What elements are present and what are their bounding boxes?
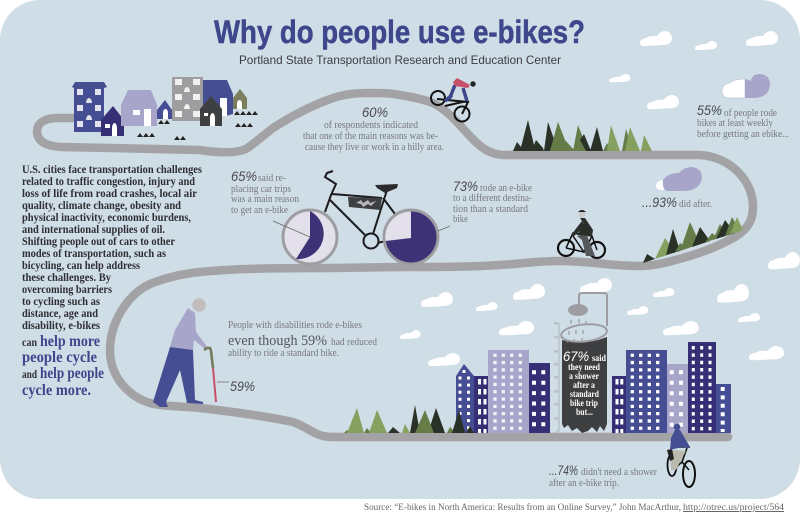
body paragraph: to cycling such as bbox=[22, 295, 100, 308]
gauge scale: 0 bbox=[556, 430, 558, 434]
source line: http://otrec.us/project/564 bbox=[683, 502, 784, 513]
bike frame bbox=[325, 171, 395, 243]
shower gauge with dark tank: after a bbox=[573, 381, 595, 391]
cane bbox=[204, 348, 213, 368]
text: 59 percent cane label: 59% bbox=[230, 378, 255, 394]
body paragraph: people cycle bbox=[22, 349, 97, 366]
text: 65 percent: was a main reason bbox=[231, 194, 300, 205]
text: 74 percent: after an e-bike trip. bbox=[549, 478, 619, 489]
text: 60 percent hilly: that one of the main reasons was be- bbox=[303, 131, 438, 142]
gauge scale: 40 bbox=[554, 376, 558, 380]
body paragraph: cycle more. bbox=[22, 382, 91, 399]
tank rim bbox=[560, 322, 608, 344]
shower gauge with dark tank: standard bbox=[570, 390, 600, 400]
shower gauge with dark tank: a shower bbox=[569, 372, 600, 382]
shower gauge with dark tank bbox=[554, 293, 608, 434]
head bbox=[192, 298, 206, 312]
gauge scale: 80 bbox=[554, 322, 558, 326]
shower pipe and head bbox=[579, 293, 607, 326]
city skyline right bbox=[612, 342, 731, 433]
body paragraph: and international supplies of oil. bbox=[22, 223, 165, 236]
gauge scale: 10 bbox=[554, 416, 558, 420]
shower gauge with dark tank: bike trip bbox=[570, 399, 598, 409]
text: disabilities: had reduced bbox=[331, 337, 378, 348]
text: 73 percent: rode an e-bike bbox=[480, 183, 532, 194]
olive house bbox=[233, 89, 247, 109]
text: 93 percent: ...93% bbox=[642, 194, 677, 210]
text: 60 percent hilly: cause they live or work in a hilly area. bbox=[305, 142, 444, 153]
pie wheel 65 percent bbox=[273, 210, 337, 264]
body paragraph: quality, climate change, obesity and bbox=[22, 199, 181, 212]
text: 60 percent hilly: of respondents indicated bbox=[324, 120, 419, 131]
body paragraph: distance, age and bbox=[22, 307, 98, 320]
legs bbox=[153, 347, 203, 407]
tank text: 67% bbox=[563, 348, 589, 364]
body paragraph: and bbox=[22, 368, 37, 381]
drops bbox=[567, 319, 586, 343]
gauge scale: 20 bbox=[554, 402, 558, 406]
text: 73 percent: 73% bbox=[453, 178, 478, 194]
icon: mostly filled cloud 93 percent bbox=[656, 167, 702, 191]
dark tank bbox=[562, 337, 607, 433]
body paragraph: these challenges. By bbox=[22, 271, 111, 284]
forest on slope bbox=[643, 217, 743, 263]
text: 65 percent bbox=[231, 168, 300, 216]
body paragraph: help more bbox=[40, 333, 100, 350]
text: 55 percent: bikes at least weekly bbox=[697, 118, 774, 129]
icon: elderly man with cane bbox=[153, 298, 229, 407]
shower gauge with dark tank: but... bbox=[576, 408, 593, 418]
gauge scale: 30 bbox=[554, 390, 558, 394]
gauge scale: 60 bbox=[554, 350, 558, 354]
text: 55 percent: before getting an ebike... bbox=[697, 129, 789, 140]
blue barn bbox=[203, 80, 233, 116]
text: 73 percent: tion than a standard bbox=[453, 204, 529, 215]
body paragraph: disability, e-bikes bbox=[22, 319, 100, 332]
village of houses bbox=[72, 77, 258, 140]
text: disabilities: even though 59% bbox=[228, 333, 327, 349]
text: disabilities: People with disabilities rode e-bikes bbox=[228, 320, 362, 331]
city skyline left bbox=[456, 350, 550, 433]
body paragraph: physical inactivity, economic burdens, bbox=[22, 211, 191, 224]
gauge scale bbox=[554, 322, 559, 434]
body paragraph: Shifting people out of cars to other bbox=[22, 235, 175, 248]
icon: half cloud 55 percent bbox=[722, 74, 770, 98]
text: 74 percent: ...74% bbox=[549, 462, 578, 478]
battery bbox=[348, 197, 382, 210]
body paragraph: bicycling, can help address bbox=[22, 259, 140, 272]
gauge scale: 70 bbox=[554, 336, 558, 340]
text: 65 percent: 65% bbox=[231, 168, 257, 184]
bicycle with pie-chart wheels bbox=[273, 171, 450, 264]
pie wheel 73 percent bbox=[384, 210, 450, 264]
text: 73 percent bbox=[453, 178, 532, 225]
text: 74 percent: didn't need a shower bbox=[581, 467, 657, 478]
body paragraph: overcoming barriers bbox=[22, 283, 112, 296]
text: 55 percent: 55% bbox=[697, 102, 722, 118]
dark navy house bbox=[101, 106, 124, 136]
shower gauge with dark tank: said bbox=[592, 354, 607, 364]
body paragraph: help people bbox=[40, 365, 104, 382]
body paragraph: modes of transportation, such as bbox=[22, 247, 166, 260]
subtitle: Portland State Transportation Research and Education Center bbox=[239, 53, 561, 67]
text: 65 percent: placing car trips bbox=[231, 184, 291, 195]
grey block bbox=[172, 77, 203, 121]
icon: commuter cyclist bbox=[558, 210, 605, 258]
gauge scale: 50 bbox=[554, 362, 558, 366]
text: 55 percent: of people rode bbox=[724, 108, 777, 119]
text: disabilities bbox=[228, 320, 378, 359]
winding road bbox=[37, 93, 753, 437]
text: 60 percent hilly: 60% bbox=[362, 104, 388, 120]
tall blue building bbox=[72, 82, 107, 132]
body paragraph: can bbox=[22, 336, 37, 349]
crank bbox=[364, 234, 378, 248]
source line: Source: “E-bikes in North America: Results from an Online Survey,” John MacArthur, bbox=[364, 502, 681, 513]
forest on hill bbox=[513, 120, 652, 151]
body paragraph: related to traffic congestion, injury and bbox=[22, 175, 195, 188]
title: Why do people use e-bikes? bbox=[214, 14, 585, 50]
torso and arm bbox=[170, 308, 208, 350]
small blue house bbox=[157, 100, 172, 119]
body paragraph: U.S. cities face transportation challenges bbox=[22, 163, 202, 176]
text: 93 percent: did after. bbox=[679, 199, 712, 210]
icon: rider from behind bbox=[667, 424, 695, 487]
text: 65 percent: to get an e-bike bbox=[231, 205, 288, 216]
text: 65 percent: said re- bbox=[258, 173, 286, 184]
text: 74 percent bbox=[549, 462, 657, 489]
text: 93 percent bbox=[642, 194, 712, 210]
text: 55 percent bbox=[697, 102, 789, 140]
shrubs bbox=[137, 111, 258, 140]
shower gauge with dark tank: they need bbox=[568, 363, 601, 373]
text: disabilities: ability to ride a standard bike. bbox=[228, 348, 339, 359]
clouds bbox=[400, 31, 800, 366]
icon: mountain biker bbox=[431, 78, 476, 122]
text: 60 percent hilly bbox=[303, 104, 444, 153]
lavender house bbox=[121, 90, 157, 126]
text: 73 percent: to a different destina- bbox=[453, 193, 532, 204]
saddle bbox=[375, 184, 398, 193]
text: 73 percent: bike bbox=[453, 214, 468, 225]
body paragraph: loss of life from road crashes, local air bbox=[22, 187, 197, 200]
charcoal house bbox=[200, 96, 222, 126]
body paragraph bbox=[22, 163, 202, 399]
lower forest bbox=[344, 405, 474, 433]
